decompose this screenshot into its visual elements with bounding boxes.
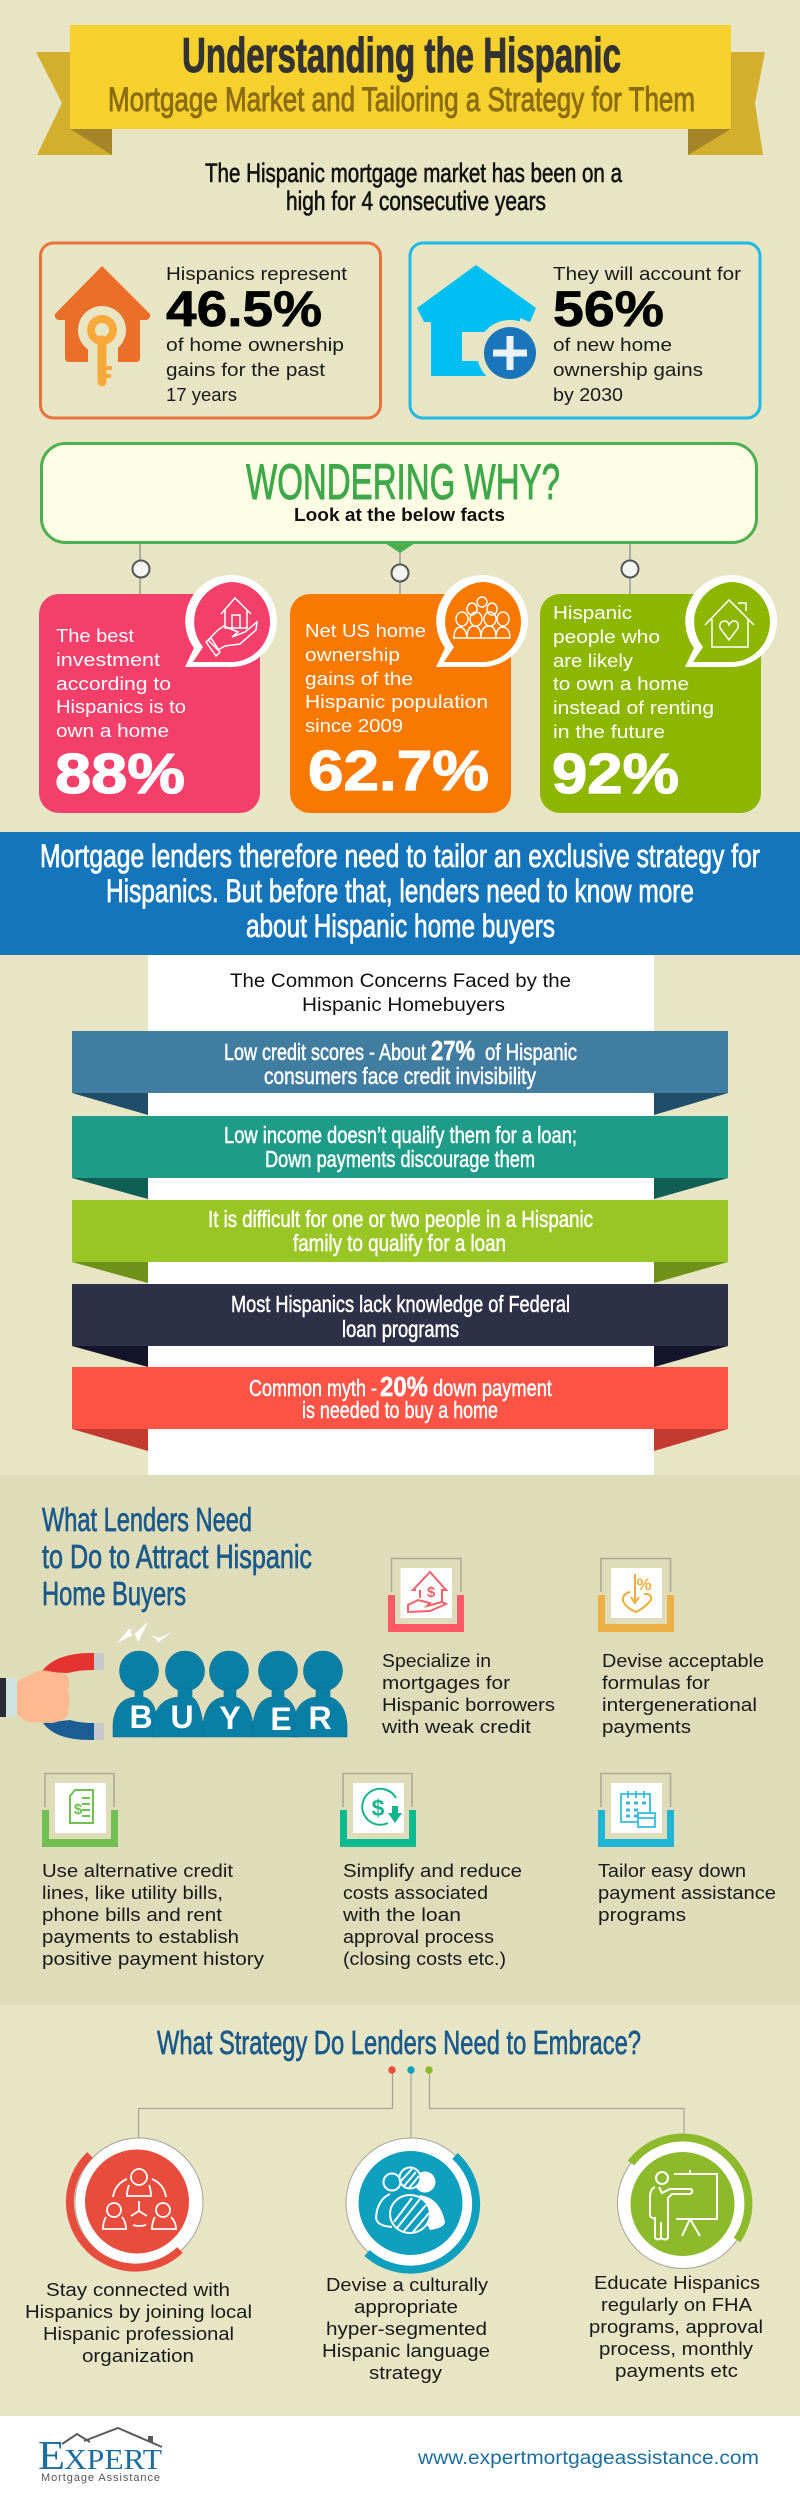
- item text: approval process: [343, 1927, 494, 1947]
- card text: in the future: [553, 722, 665, 742]
- item text: Devise acceptable: [602, 1651, 764, 1671]
- item text: with weak credit: [381, 1717, 531, 1737]
- icon: teacher with board: [650, 2170, 717, 2240]
- item text: payments to establish: [42, 1927, 239, 1947]
- illustration: magnet attracting buyers: [0, 1622, 347, 1740]
- illustration: magnet attracting buyers: E: [270, 1701, 292, 1737]
- card text: [55, 626, 186, 806]
- item text: with the loan: [342, 1905, 461, 1925]
- strategy text: Stay connected with: [46, 2280, 230, 2300]
- icon: dollar arrow and hand: [408, 1572, 446, 1612]
- strategy text: Hispanic language: [322, 2341, 490, 2361]
- concerns heading: Hispanic Homebuyers: [302, 995, 505, 1016]
- icon: crowd of people: [436, 575, 528, 667]
- panel: culturally appropriate: [322, 2138, 490, 2383]
- item: simplify and reduce costs: [340, 1774, 522, 1969]
- item: specialize in mortgages: [381, 1558, 555, 1737]
- item text: payments: [602, 1717, 691, 1737]
- connector lines and dots: [138, 2066, 684, 2138]
- title banner: [36, 25, 765, 155]
- heading: WONDERING WHY?: [246, 454, 560, 510]
- stat text: 56%: [553, 281, 664, 337]
- ribbon: federal programs: [72, 1284, 728, 1367]
- illustration: magnet attracting buyers: B: [129, 1699, 153, 1735]
- ribbon: family qualify: It is difficult for one or two people in a Hispanic: [208, 1206, 593, 1232]
- item text: [342, 1861, 522, 1969]
- ribbon: low credit scores: consumers face credit invisibility: [264, 1063, 536, 1089]
- ribbon: common myth: [72, 1367, 728, 1451]
- card text: [305, 621, 489, 803]
- strategy text: Educate Hispanics: [594, 2273, 760, 2293]
- card text: instead of renting: [553, 698, 714, 718]
- item text: Hispanic borrowers: [382, 1695, 555, 1715]
- card text: according to: [56, 674, 171, 694]
- icon: bill document: $: [74, 1801, 83, 1818]
- icon: house with plus: [417, 265, 543, 386]
- icon: percent and arrow heart: %: [636, 1575, 652, 1594]
- logo: [38, 2428, 162, 2484]
- panel: 46.5% stat: [40, 243, 380, 418]
- blue band: [0, 832, 800, 955]
- intro text: high for 4 consecutive years: [286, 186, 546, 216]
- icon: dollar circle with arrow: [362, 1789, 402, 1825]
- stat text: ownership gains: [553, 360, 703, 380]
- item text: [42, 1861, 264, 1969]
- item: down payment assistance: [598, 1774, 776, 1925]
- ribbon: common myth: 20%: [380, 1371, 428, 1402]
- card text: Net US home: [305, 621, 426, 641]
- card text: investment: [56, 650, 160, 670]
- panel: wondering why: [42, 444, 756, 594]
- ribbon: family qualify: family to qualify for a loan: [293, 1230, 506, 1256]
- intro text: The Hispanic mortgage market has been on a: [205, 158, 623, 188]
- subheading: Look at the below facts: [294, 504, 505, 525]
- ribbon: common myth: down payment: [433, 1375, 552, 1401]
- panel: 92% card: [540, 575, 777, 813]
- ribbon: family qualify: [72, 1200, 728, 1283]
- strategy text: payments etc: [615, 2361, 738, 2381]
- concerns heading: [230, 971, 571, 1016]
- stat text: 46.5%: [166, 281, 322, 337]
- strategy text: [322, 2275, 490, 2383]
- item text: positive payment history: [42, 1949, 264, 1969]
- blue band: about Hispanic home buyers: [246, 908, 555, 944]
- illustration: magnet attracting buyers: Y: [219, 1700, 241, 1736]
- stat text: of home ownership: [166, 335, 344, 355]
- card text: ownership: [305, 645, 400, 665]
- ribbon: federal programs: loan programs: [342, 1316, 459, 1342]
- item text: costs associated: [343, 1883, 488, 1903]
- card text: are likely: [553, 651, 633, 671]
- item text: Tailor easy down: [598, 1861, 746, 1881]
- card text: [552, 603, 714, 806]
- card text: own a home: [56, 721, 169, 741]
- illustration: magnet attracting buyers: R: [308, 1700, 332, 1736]
- stat text: They will account for: [553, 264, 741, 284]
- ribbon: federal programs: Most Hispanics lack knowledge of Federal: [231, 1291, 570, 1317]
- ribbon: low income: Low income doesn’t qualify them for a loan;: [224, 1122, 577, 1148]
- icon: calendar: [621, 1791, 655, 1827]
- ribbon: common myth: Common myth -: [249, 1375, 377, 1401]
- card text: Hispanics is to: [56, 697, 186, 717]
- card text: gains of the: [305, 669, 413, 689]
- card text: to own a home: [553, 674, 689, 694]
- ribbon: low credit scores: 27%: [431, 1035, 475, 1066]
- logo: Mortgage Assistance: [41, 2472, 160, 2484]
- card text: Hispanic population: [305, 692, 488, 712]
- icon: hand holding house: [185, 575, 277, 667]
- panel: what lenders need to do: [0, 1475, 800, 2005]
- strategy text: programs, approval: [589, 2317, 763, 2337]
- card text: since 2009: [305, 716, 403, 736]
- icon: connected people: [103, 2169, 176, 2229]
- section heading: What Lenders Need: [42, 1501, 252, 1538]
- card text: 88%: [55, 742, 185, 806]
- strategy text: Hispanics by joining local: [25, 2302, 252, 2322]
- item text: Specialize in: [382, 1651, 491, 1671]
- strategy text: [25, 2280, 252, 2366]
- ribbon: common myth: is needed to buy a home: [302, 1397, 498, 1423]
- strategy text: process, monthly: [599, 2339, 753, 2359]
- item text: formulas for: [602, 1673, 710, 1693]
- logo: E: [38, 2432, 65, 2478]
- website url: www.expertmortgageassistance.com: [417, 2448, 759, 2469]
- panel: common concerns: [72, 955, 728, 1475]
- intro text: [205, 158, 623, 216]
- panel: educate hispanics: [589, 2138, 763, 2381]
- panel: 56% stat: [410, 243, 760, 418]
- item: intergenerational formulas: [598, 1558, 764, 1737]
- strategy text: Hispanic professional: [43, 2324, 234, 2344]
- illustration: magnet attracting buyers: U: [170, 1699, 194, 1735]
- icon: bill document: [70, 1790, 93, 1823]
- panel: 88% card: [39, 575, 277, 813]
- item text: [602, 1651, 764, 1737]
- stat text: 17 years: [166, 385, 237, 405]
- ribbon: low income: [72, 1116, 728, 1199]
- item text: mortgages for: [382, 1673, 510, 1693]
- card text: people who: [553, 627, 660, 647]
- item text: Use alternative credit: [42, 1861, 233, 1881]
- footer: [0, 2416, 800, 2500]
- panel: 62.7% card: [290, 575, 528, 813]
- icon: percent and arrow heart: [623, 1574, 652, 1612]
- ribbon: low credit scores: of Hispanic: [485, 1039, 577, 1065]
- item: alternative credit lines: [42, 1774, 264, 1969]
- item text: Simplify and reduce: [343, 1861, 522, 1881]
- item text: payment assistance: [598, 1883, 776, 1903]
- item text: (closing costs etc.): [343, 1949, 506, 1969]
- logo: XPERT: [64, 2444, 162, 2476]
- section heading: Home Buyers: [42, 1575, 186, 1612]
- card text: 92%: [552, 742, 679, 806]
- card text: 62.7%: [308, 739, 489, 803]
- stat text: of new home: [553, 335, 672, 355]
- stat text: Hispanics represent: [166, 264, 347, 284]
- strategy text: appropriate: [354, 2297, 458, 2317]
- panel: stay connected: [25, 2138, 252, 2366]
- card text: The best: [56, 626, 134, 646]
- item text: [598, 1861, 776, 1925]
- section heading: [42, 1501, 312, 1612]
- stat text: by 2030: [553, 385, 623, 405]
- stat text: gains for the past: [166, 360, 325, 380]
- ribbon: low income: Down payments discourage them: [265, 1146, 535, 1172]
- strategy text: strategy: [369, 2363, 442, 2383]
- strategy text: hyper-segmented: [326, 2319, 487, 2339]
- strategy text: regularly on FHA: [601, 2295, 752, 2315]
- icon: dollar arrow and hand: $: [427, 1584, 436, 1601]
- strategy text: organization: [82, 2346, 194, 2366]
- stat text: [166, 264, 347, 405]
- icon: house with heart: [685, 575, 777, 667]
- icon: dollar circle with arrow: $: [372, 1795, 385, 1821]
- strategy text: [589, 2273, 763, 2381]
- item text: lines, like utility bills,: [42, 1883, 223, 1903]
- icon: house with key: [55, 266, 150, 382]
- icon: people group: [376, 2168, 445, 2233]
- item text: phone bills and rent: [42, 1905, 222, 1925]
- item text: programs: [598, 1905, 686, 1925]
- item text: intergenerational: [602, 1695, 757, 1715]
- ribbon: low credit scores: Low credit scores - About: [224, 1039, 426, 1065]
- strategy text: Devise a culturally: [326, 2275, 488, 2295]
- section heading: to Do to Attract Hispanic: [42, 1538, 312, 1575]
- concerns heading: The Common Concerns Faced by the: [230, 971, 571, 992]
- item text: [381, 1651, 555, 1737]
- stat text: [553, 264, 741, 405]
- ribbon: low credit scores: [72, 1031, 728, 1115]
- card text: Hispanic: [553, 603, 632, 623]
